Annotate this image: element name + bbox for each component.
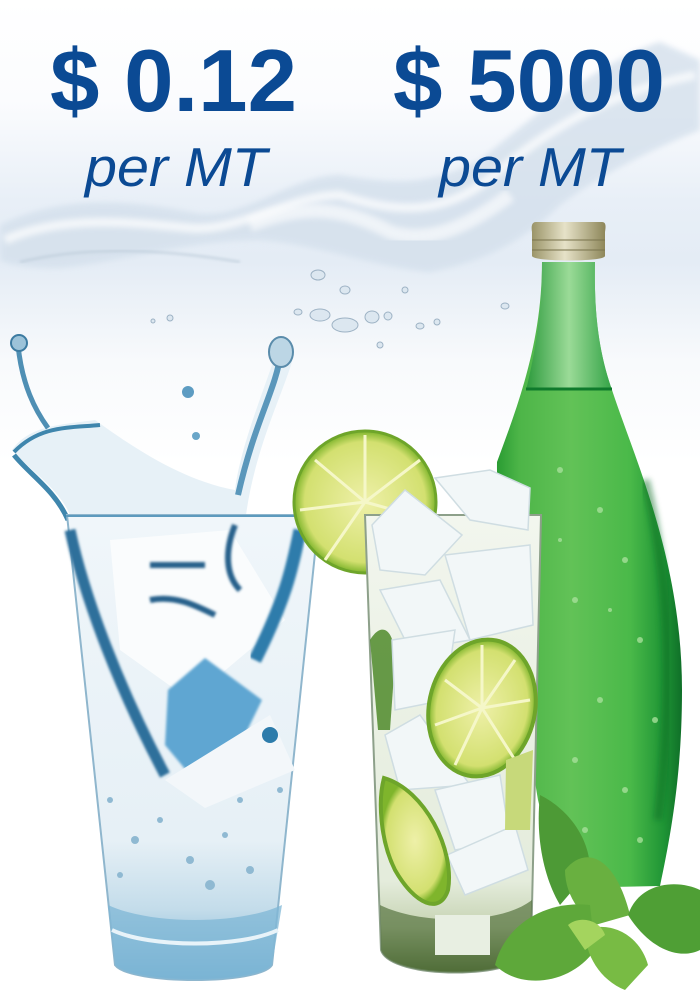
ice cube — [110, 530, 295, 808]
condensation on bottle — [557, 467, 658, 843]
heading: price of tap water: $ 0.12 — [50, 31, 297, 130]
ice cubes — [372, 470, 533, 895]
heading: price of bottled water — [393, 31, 665, 198]
water wave splash — [0, 42, 700, 272]
blue swirl — [70, 530, 165, 775]
lime slice on rim — [294, 431, 436, 573]
heading: price of bottled water: $ 5000 — [393, 31, 665, 130]
splash above blue glass — [11, 335, 293, 520]
glass base — [108, 905, 282, 980]
heading: price of bottled water: per MT — [437, 136, 625, 198]
glass base — [380, 900, 532, 972]
mint leaves — [495, 795, 700, 990]
water droplets under wave — [151, 270, 509, 348]
mojito glass — [365, 470, 548, 972]
water glass with ice — [66, 515, 319, 980]
green glass bottle — [497, 222, 682, 888]
condensation drops — [107, 727, 283, 890]
bottle cap — [532, 222, 606, 260]
lime slice in glass — [416, 629, 548, 787]
heading: price of tap water — [50, 31, 297, 198]
heading: price of tap water: per MT — [83, 136, 271, 198]
lower lime slice — [381, 778, 449, 904]
